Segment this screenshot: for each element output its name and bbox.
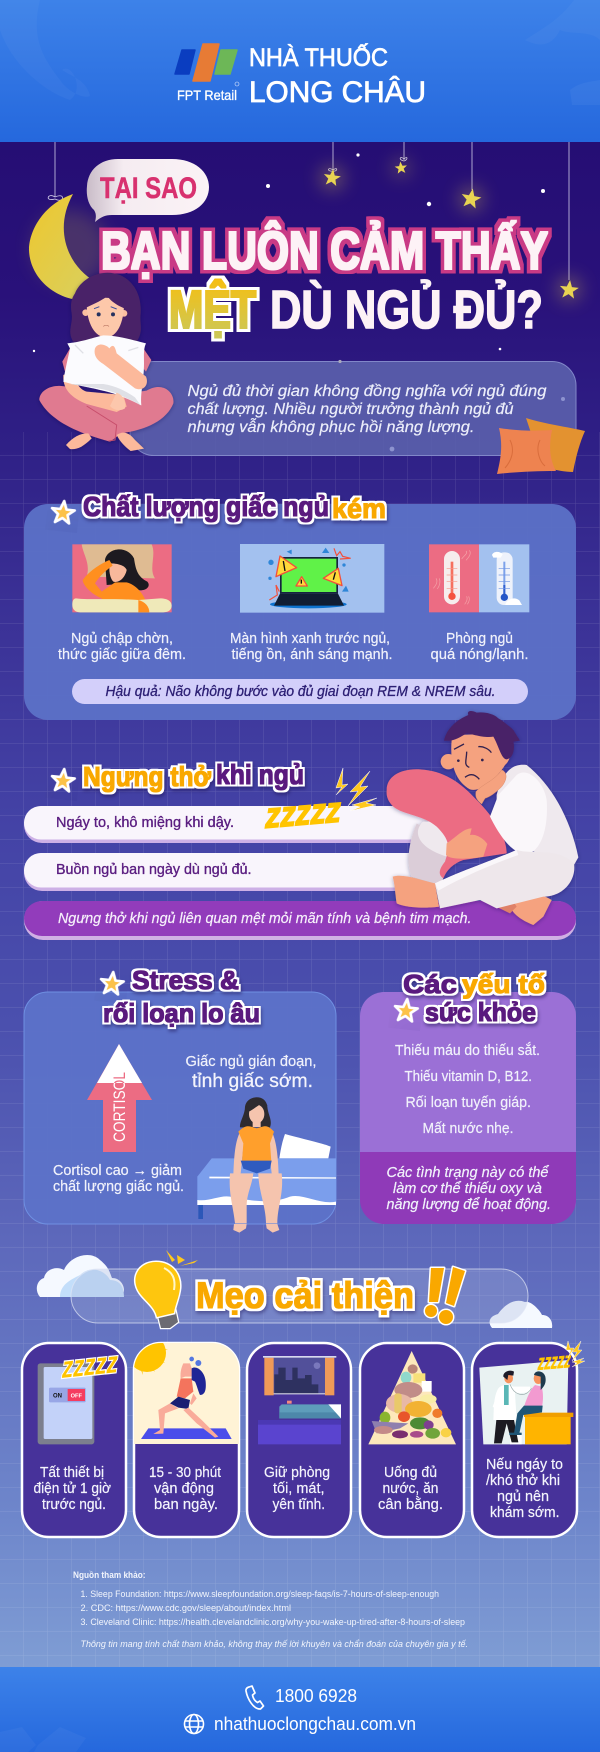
- banner: Mẹo cải thiện: [71, 1250, 528, 1328]
- panel: intro: [130, 360, 576, 456]
- captions: [58, 631, 528, 663]
- card: food pyramid: [360, 1343, 464, 1537]
- snoring zzzzz and bolts: zzzzz: [263, 789, 345, 836]
- panel: health factors: [360, 969, 576, 1224]
- card: see a doctor: khám sớm.: [490, 1504, 560, 1521]
- card: dark quiet room: yên tĩnh.: [272, 1496, 325, 1513]
- card: dark quiet room: Giữ phòng: [264, 1464, 330, 1481]
- snoring zzzzz and bolts: [263, 768, 377, 836]
- tip cards: [22, 1334, 585, 1537]
- card: see a doctor: ngủ nên: [497, 1488, 549, 1505]
- card: daytime exercise: [128, 1334, 239, 1537]
- italic note: Các tình trạng này có thể: [386, 1165, 549, 1181]
- list of conditions: [395, 1042, 540, 1137]
- title: MỆT: [169, 279, 256, 340]
- card: daytime exercise: ban ngày.: [154, 1496, 218, 1513]
- text: cortisol effect: [53, 1163, 184, 1195]
- card: see a doctor: /khó thở khi: [486, 1472, 560, 1489]
- card: turn off devices: [22, 1343, 126, 1537]
- heading: Các yếu tố sức khỏe: sức khỏe: [425, 997, 536, 1027]
- text: cortisol effect: Cortisol cao → giảm: [53, 1163, 182, 1179]
- card: food pyramid: nước, ăn: [382, 1480, 438, 1497]
- clouds: [37, 1255, 552, 1328]
- italic note: [386, 1165, 551, 1213]
- heading: Chất lượng giấc ngủ kém: Chất lượng giấc ngủ: [83, 491, 329, 522]
- title: [101, 220, 548, 340]
- illustration: woman hugging pillow: [39, 273, 173, 451]
- icon: globe: [184, 1714, 204, 1734]
- heading: Chất lượng giấc ngủ kém: kém: [332, 493, 386, 524]
- heading: Ngưng thở khi ngủ: khi ngủ: [216, 759, 304, 790]
- captions: Màn hình xanh trước ngủ,: [230, 631, 390, 647]
- captions: Phòng ngủ: [446, 631, 513, 647]
- card: daytime exercise: vận động: [154, 1480, 214, 1497]
- card: see a doctor: zzzzz: [536, 1347, 573, 1375]
- intro text: Ngủ đủ thời gian không đồng nghĩa với ngủ đúng: [188, 383, 547, 400]
- panel: stress and anxiety: [24, 965, 336, 1233]
- heading: Stress & rối loạn lo âu: Stress &: [132, 965, 239, 995]
- card: see a doctor: Nếu ngáy to: [486, 1456, 563, 1473]
- intro text: chất lượng. Nhiều người trưởng thành ngủ đủ: [188, 401, 514, 418]
- symptom rows: Ngáy to, khô miệng khi dậy.: [56, 815, 234, 831]
- card: turn off devices: trước ngủ.: [42, 1496, 106, 1513]
- card: food pyramid: Uống đủ: [384, 1464, 437, 1481]
- heading: Stress & rối loạn lo âu: [100, 965, 260, 1028]
- list of conditions: Mất nước nhẹ.: [422, 1121, 514, 1137]
- logo: FPT Retail: [175, 44, 239, 103]
- references: 2. CDC: https://www.cdc.gov/sleep/about/index.html: [80, 1603, 291, 1613]
- illustration: woman sitting on bed: [197, 1097, 336, 1233]
- image: hot and cold thermometers: [429, 544, 529, 612]
- hanging stars and dots: [33, 142, 581, 352]
- text: cortisol effect: chất lượng giấc ngủ.: [53, 1179, 184, 1195]
- heading: Các yếu tố sức khỏe: [394, 969, 545, 1027]
- arrow: cortisol rising: CORTISOL: [111, 1072, 129, 1142]
- intro text: nhưng vẫn không phục hồi năng lượng.: [188, 419, 474, 436]
- card: dark quiet room: tối, mát,: [273, 1480, 324, 1497]
- image: restless sleeper: [72, 544, 172, 612]
- brand name: LONG CHÂU: [249, 76, 426, 109]
- exclamation marks: [425, 1267, 465, 1324]
- card: food pyramid: cân bằng.: [378, 1496, 443, 1513]
- illustration: tired man hugging pillow: [387, 711, 578, 925]
- heading: Các yếu tố sức khỏe: Các: [403, 969, 457, 999]
- heading text: Mẹo cải thiện: [196, 1275, 414, 1316]
- italic note: năng lượng để hoạt động.: [386, 1197, 551, 1213]
- website: nhathuoclongchau.com.vn: [214, 1714, 416, 1734]
- captions: thức giấc giữa đêm.: [58, 647, 186, 663]
- card: see a doctor: [472, 1341, 585, 1537]
- captions: Ngủ chập chờn,: [71, 631, 173, 647]
- consequence pill: [72, 679, 528, 704]
- card: turn off devices: zzzzz: [60, 1345, 121, 1385]
- references: Thông tin mang tính chất tham khảo, không thay thế lời khuyên và chẩn đoán của chuyên gia y tế.: [80, 1639, 468, 1649]
- header band: [0, 0, 600, 142]
- image: laptop with warnings: [240, 544, 384, 613]
- footer band: [0, 1667, 600, 1752]
- icon: orange pillows: [497, 418, 585, 474]
- card: turn off devices: Tất thiết bị: [40, 1464, 104, 1481]
- card: turn off devices: điện tử 1 giờ: [34, 1480, 111, 1497]
- symptom rows: [24, 806, 444, 891]
- card: daytime exercise: 15 - 30 phút: [149, 1464, 222, 1481]
- card: dark quiet room: [247, 1343, 351, 1537]
- text: interrupted sleep: tỉnh giấc sớm.: [192, 1071, 313, 1092]
- text: interrupted sleep: [186, 1054, 316, 1092]
- text: interrupted sleep: Giấc ngủ gián đoạn,: [186, 1054, 316, 1070]
- logo: FPT Retail: FPT Retail: [177, 87, 237, 103]
- references: [73, 1570, 468, 1649]
- references: 1. Sleep Foundation: https://www.sleepfoundation.org/sleep-faqs/is-7-hours-of-sleep-enough: [80, 1589, 439, 1599]
- arrow: cortisol rising: [87, 1044, 152, 1152]
- icon: light bulb: [135, 1250, 198, 1328]
- brand name: NHÀ THUỐC: [249, 42, 388, 72]
- speech bubble: TẠI SAO: TẠI SAO: [100, 172, 197, 205]
- card: turn off devices: OFF: [71, 1394, 83, 1400]
- list of conditions: Rối loạn tuyến giáp.: [406, 1095, 531, 1111]
- panel: poor sleep quality: [24, 491, 576, 720]
- card: turn off devices: ON: [53, 1394, 62, 1400]
- heading: Ngưng thở khi ngủ: Ngưng thở: [83, 761, 211, 792]
- captions: quá nóng/lạnh.: [430, 647, 528, 663]
- speech bubble: TẠI SAO: [87, 159, 209, 222]
- phone number: 1800 6928: [275, 1686, 357, 1706]
- heading: Ngưng thở khi ngủ: [51, 759, 304, 792]
- italic note: làm cơ thể thiếu oxy và: [393, 1181, 542, 1197]
- intro text: [188, 383, 547, 436]
- list of conditions: Thiếu vitamin D, B12.: [404, 1069, 532, 1085]
- references: Nguồn tham khảo:: [73, 1570, 146, 1580]
- captions: tiếng ồn, ánh sáng mạnh.: [232, 647, 392, 663]
- brand name: [249, 42, 426, 109]
- purple callout row: [24, 901, 576, 940]
- title: DÙ NGỦ ĐỦ?: [270, 280, 543, 340]
- heading: Các yếu tố sức khỏe: yếu tố: [462, 969, 545, 999]
- consequence pill: Hậu quả: Não không bước vào đủ giai đoạn REM & NREM sâu.: [106, 684, 496, 700]
- heading: Stress & rối loạn lo âu: rối loạn lo âu: [103, 998, 260, 1028]
- icon: phone: [246, 1686, 264, 1709]
- list of conditions: Thiếu máu do thiếu sắt.: [395, 1042, 540, 1059]
- purple callout row: Ngưng thở khi ngủ liên quan mệt mỏi mãn tính và bệnh tim mạch.: [58, 911, 472, 927]
- moon: [29, 194, 108, 300]
- symptom rows: Buồn ngủ ban ngày dù ngủ đủ.: [56, 862, 252, 878]
- references: 3. Cleveland Clinic: https://health.clevelandclinic.org/why-you-wake-up-tired-after-8-hours-of-sleep: [80, 1617, 465, 1627]
